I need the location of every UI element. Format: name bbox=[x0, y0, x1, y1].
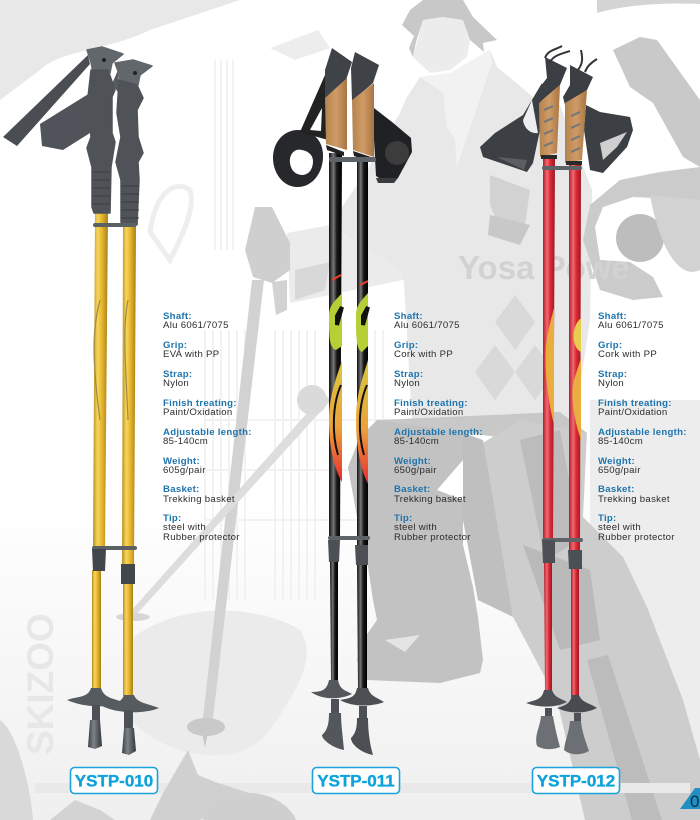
spec text: YSTP-010: Basket: bbox=[163, 484, 200, 495]
grips bbox=[87, 47, 152, 225]
spec text: YSTP-012: Rubber protector bbox=[598, 532, 675, 543]
spec text: YSTP-011: Cork with PP bbox=[394, 349, 453, 360]
spec text: YSTP-012: steel with bbox=[598, 522, 641, 533]
coat bbox=[330, 50, 592, 420]
shafts bbox=[329, 153, 368, 690]
model label: YSTP-011: YSTP-011 bbox=[317, 772, 395, 790]
spec text: YSTP-011: Grip: bbox=[394, 340, 418, 351]
spec text: YSTP-010: Finish treating: bbox=[163, 398, 237, 409]
spec text: YSTP-011: Shaft: bbox=[394, 311, 423, 322]
spec text: YSTP-010: steel with bbox=[163, 522, 206, 533]
spec text: YSTP-011: Rubber protector bbox=[394, 532, 471, 543]
spec text: YSTP-011: 85-140cm bbox=[394, 436, 439, 447]
pole pair: YSTP-012 bbox=[480, 46, 633, 754]
spec text: YSTP-010 bbox=[163, 311, 252, 543]
shafts bbox=[92, 213, 136, 696]
spec text: YSTP-012: Nylon bbox=[598, 378, 624, 389]
spec text: YSTP-011: Adjustable length: bbox=[394, 427, 483, 438]
model label: YSTP-012 bbox=[532, 768, 620, 794]
spec text: YSTP-012: 85-140cm bbox=[598, 436, 643, 447]
spec text: YSTP-010: Adjustable length: bbox=[163, 427, 252, 438]
spec text: YSTP-011: steel with bbox=[394, 522, 437, 533]
spec text: YSTP-012: Basket: bbox=[598, 484, 635, 495]
model label: YSTP-010 bbox=[70, 768, 158, 794]
background hand and pole bbox=[202, 280, 264, 727]
grips bbox=[325, 48, 379, 162]
page number badge: 0 bbox=[690, 792, 699, 811]
spec text: YSTP-010: 605g/pair bbox=[163, 465, 206, 476]
spec text: YSTP-011: Finish treating: bbox=[394, 398, 468, 409]
model label: YSTP-010: YSTP-010 bbox=[75, 772, 153, 790]
background illustration: hiker figure: SKIZOO bbox=[20, 613, 61, 755]
straps bbox=[480, 83, 633, 173]
model label: YSTP-012: YSTP-012 bbox=[537, 772, 615, 790]
spec text: YSTP-010: Tip: bbox=[163, 513, 182, 524]
straps bbox=[273, 75, 412, 187]
scarf swirl bbox=[597, 0, 700, 13]
upper and lower clamps bbox=[92, 223, 137, 584]
spec text: YSTP-010: Shaft: bbox=[163, 311, 192, 322]
spec text: YSTP-011: Trekking basket bbox=[394, 494, 466, 505]
grips bbox=[539, 46, 597, 165]
model label: YSTP-011 bbox=[312, 768, 400, 794]
spec text: YSTP-012: Grip: bbox=[598, 340, 622, 351]
spec text: YSTP-012 bbox=[598, 311, 687, 543]
sleeve bbox=[287, 225, 403, 303]
baskets and tips bbox=[311, 680, 384, 755]
spec text: YSTP-010: 85-140cm bbox=[163, 436, 208, 447]
faint stripes bbox=[205, 60, 390, 600]
spec text: YSTP-011: Alu 6061/7075 bbox=[394, 320, 460, 331]
page number badge bbox=[680, 788, 700, 811]
bottom left decoration bbox=[0, 720, 33, 820]
spec text: YSTP-012: Tip: bbox=[598, 513, 617, 524]
watermark text: Yosa Powe bbox=[458, 249, 630, 286]
spec text: YSTP-010: EVA with PP bbox=[163, 349, 219, 360]
spec text: YSTP-012: Weight: bbox=[598, 456, 635, 467]
spec text: YSTP-012: Shaft: bbox=[598, 311, 627, 322]
spec text: YSTP-010: Weight: bbox=[163, 456, 200, 467]
left leg bbox=[348, 420, 483, 683]
spec text: YSTP-011: Paint/Oxidation bbox=[394, 407, 464, 418]
spec text: YSTP-011 bbox=[394, 311, 483, 543]
spec text: YSTP-010: Paint/Oxidation bbox=[163, 407, 233, 418]
spec text: YSTP-010: Alu 6061/7075 bbox=[163, 320, 229, 331]
clamps and lower sections bbox=[542, 166, 583, 569]
spec text: YSTP-012: Cork with PP bbox=[598, 349, 657, 360]
spec text: YSTP-010: Grip: bbox=[163, 340, 187, 351]
shaft graphics bbox=[329, 275, 368, 484]
strap bbox=[3, 55, 120, 150]
spec text: YSTP-011: Basket: bbox=[394, 484, 431, 495]
spec text: YSTP-010: Trekking basket bbox=[163, 494, 235, 505]
spec text: YSTP-011: 650g/pair bbox=[394, 465, 437, 476]
pole pair: YSTP-010 bbox=[3, 47, 159, 755]
spec text: YSTP-011: Tip: bbox=[394, 513, 413, 524]
spec text: YSTP-010: Nylon bbox=[163, 378, 189, 389]
trousers band bbox=[377, 412, 587, 440]
head bbox=[413, 17, 470, 73]
spec text: YSTP-012: Finish treating: bbox=[598, 398, 672, 409]
spec text: YSTP-012: Strap: bbox=[598, 369, 627, 380]
spec text: YSTP-012: Adjustable length: bbox=[598, 427, 687, 438]
spec text: YSTP-012: Paint/Oxidation bbox=[598, 407, 668, 418]
spec text: YSTP-011: Nylon bbox=[394, 378, 420, 389]
spec text: YSTP-012: Trekking basket bbox=[598, 494, 670, 505]
spec text: YSTP-010: Strap: bbox=[163, 369, 192, 380]
clamps and lower sections bbox=[328, 157, 376, 565]
shafts bbox=[543, 157, 581, 697]
spec text: YSTP-010: Rubber protector bbox=[163, 532, 240, 543]
second background hand and pole bbox=[130, 394, 331, 616]
right leg bbox=[483, 420, 700, 820]
spec text: YSTP-011: Strap: bbox=[394, 369, 423, 380]
baskets and tips bbox=[526, 690, 597, 754]
pole pair: YSTP-011 bbox=[273, 48, 412, 755]
spec text: YSTP-012: Alu 6061/7075 bbox=[598, 320, 664, 331]
spec text: YSTP-012: 650g/pair bbox=[598, 465, 641, 476]
baskets and tips bbox=[67, 688, 159, 755]
spec text: YSTP-011: Weight: bbox=[394, 456, 431, 467]
